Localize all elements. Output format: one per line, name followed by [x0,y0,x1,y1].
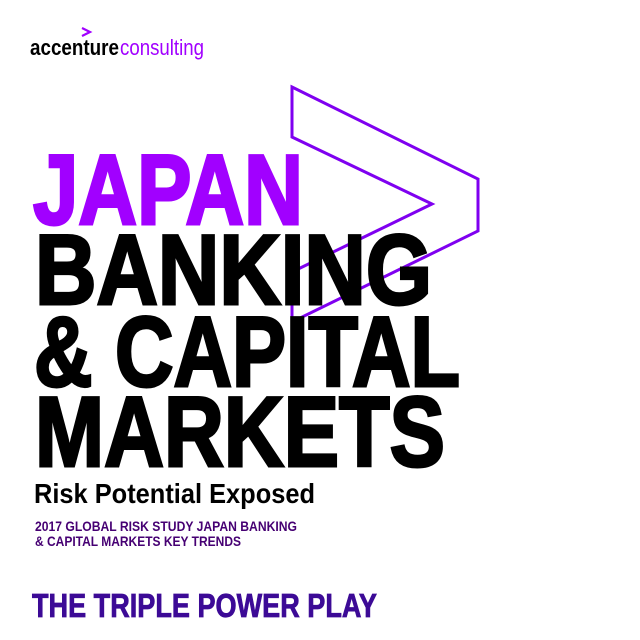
title: MARKETS: MARKETS [35,376,445,487]
title: JAPAN: JAPAN [33,134,303,245]
icon: logo chevron [82,28,90,36]
text block: study description: & CAPITAL MARKETS KEY TRENDS [35,533,241,549]
text block: study description: 2017 GLOBAL RISK STUDY JAPAN BANKING [35,518,297,534]
logo: accenture consulting: consulting [120,35,204,60]
logo: accenture consulting: accenture [30,35,119,60]
title: & CAPITAL: & CAPITAL [34,296,460,407]
title: BANKING: BANKING [35,214,432,325]
heading: THE TRIPLE POWER PLAY: THE TRIPLE POWER PLAY [32,587,377,624]
subtitle: Risk Potential Exposed: Risk Potential Exposed [34,478,315,509]
text block: study description [35,518,297,549]
icon: large outline chevron [292,87,478,322]
logo: accenture consulting [30,28,204,60]
